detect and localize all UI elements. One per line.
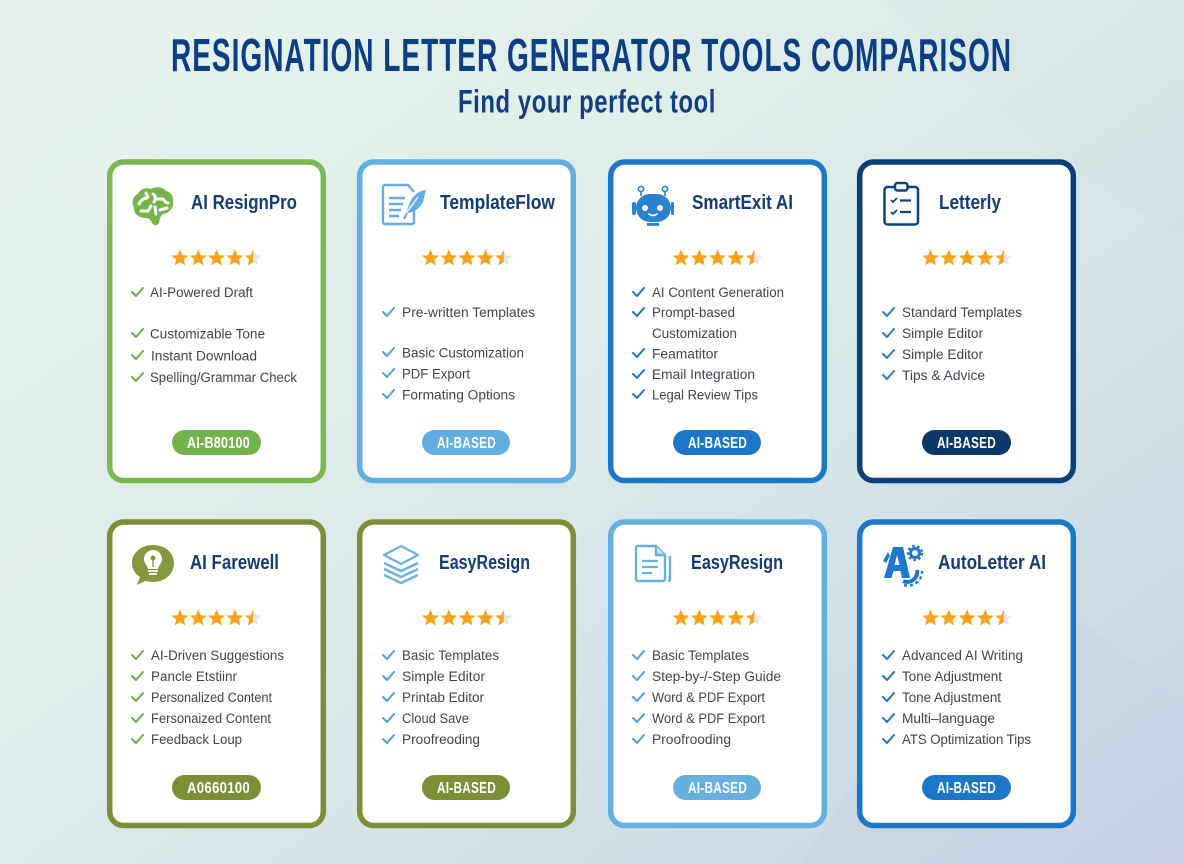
feature list: AI-Powered Draft bbox=[150, 285, 253, 301]
feature list: Cloud Save bbox=[402, 711, 469, 727]
badge bbox=[673, 775, 761, 800]
feature list: Multi–language bbox=[902, 711, 995, 727]
feature list: Tips & Advice bbox=[902, 368, 985, 384]
feature list bbox=[383, 305, 535, 404]
feature list: Spelling/Grammar Check bbox=[150, 370, 298, 386]
feature list: AI Content Generation bbox=[652, 285, 784, 301]
feature list: AI-Driven Suggestions bbox=[151, 648, 284, 664]
star rating bbox=[672, 609, 763, 625]
star rating bbox=[422, 609, 512, 625]
feature list: Basic Templates bbox=[402, 648, 499, 664]
feature list bbox=[132, 648, 284, 748]
feature list bbox=[883, 305, 1022, 384]
badge bbox=[172, 775, 261, 800]
name: AI Farewell bbox=[190, 552, 279, 574]
feature list: Personalized Content bbox=[151, 690, 272, 706]
feature list: Legal Review Tips bbox=[652, 388, 758, 404]
feature list: Pancle Etstiinr bbox=[151, 669, 237, 685]
feature list bbox=[633, 648, 781, 748]
name: Letterly bbox=[939, 192, 1002, 214]
badge: AI-B80100 bbox=[187, 435, 250, 452]
star rating bbox=[922, 249, 1012, 265]
badge: AI-BASED bbox=[937, 780, 996, 797]
panel: SmartExit AI bbox=[611, 162, 824, 480]
feature list: Tone Adjustment bbox=[902, 690, 1001, 706]
icon: brain bbox=[133, 187, 173, 225]
icon: document and quill bbox=[383, 185, 426, 224]
feature list: Feamatitor bbox=[652, 346, 718, 362]
feature list: ATS Optimization Tips bbox=[902, 732, 1031, 748]
feature list: Tone Adjustment bbox=[902, 669, 1002, 685]
badge: AI-BASED bbox=[688, 780, 747, 797]
feature list: Proofrooding bbox=[652, 732, 731, 748]
feature list: Instant Download bbox=[151, 348, 257, 364]
feature list: Prompt-based bbox=[652, 305, 735, 321]
name: EasyResign bbox=[439, 552, 530, 574]
panel: EasyResign (layers) bbox=[360, 522, 573, 826]
feature list: Printab Editor bbox=[402, 690, 484, 706]
feature list: Word & PDF Export bbox=[652, 711, 765, 727]
icon: documents bbox=[636, 546, 670, 582]
badge bbox=[422, 430, 510, 455]
badge: AI-BASED bbox=[437, 435, 496, 452]
icon: stacked layers bbox=[384, 546, 418, 583]
badge bbox=[673, 430, 761, 455]
feature list: Formating Options bbox=[402, 388, 515, 404]
feature list bbox=[132, 285, 298, 386]
feature list: Basic Customization bbox=[402, 346, 524, 362]
feature list bbox=[383, 648, 499, 748]
feature list: Word & PDF Export bbox=[652, 690, 765, 706]
star rating bbox=[922, 609, 1012, 625]
panel: Letterly bbox=[860, 162, 1073, 480]
feature list: Step-by-/-Step Guide bbox=[652, 669, 781, 685]
badge bbox=[922, 430, 1011, 455]
name: EasyResign bbox=[691, 552, 783, 574]
name: SmartExit AI bbox=[692, 192, 793, 214]
badge bbox=[172, 430, 261, 455]
name: AutoLetter AI bbox=[938, 552, 1046, 574]
panel: AI ResignPro bbox=[110, 162, 323, 480]
feature list: Email Integration bbox=[652, 367, 755, 383]
icon: letter A with gears bbox=[883, 546, 922, 586]
star rating bbox=[172, 249, 262, 265]
feature list: Customizable Tone bbox=[150, 326, 265, 342]
badge: A0660100 bbox=[187, 780, 250, 797]
feature list: Standard Templates bbox=[902, 305, 1022, 321]
icon: robot bbox=[632, 186, 674, 226]
feature list: Fersonaized Content bbox=[151, 711, 271, 727]
panel: TemplateFlow bbox=[360, 162, 573, 480]
star rating bbox=[172, 609, 262, 625]
name: TemplateFlow bbox=[440, 192, 555, 214]
badge bbox=[422, 775, 510, 800]
feature list: Simple Editor bbox=[902, 326, 983, 342]
icon: speech bubble with lightbulb bbox=[132, 545, 174, 585]
badge: AI-BASED bbox=[937, 435, 996, 452]
badge: AI-BASED bbox=[437, 780, 496, 797]
feature list: Advanced AI Writing bbox=[902, 648, 1023, 664]
feature list: Proofreoding bbox=[402, 732, 480, 748]
icon: clipboard checklist bbox=[884, 183, 918, 224]
feature list: Basic Templates bbox=[652, 648, 749, 664]
panel: AI Farewell bbox=[110, 522, 323, 826]
panel: AutoLetter AI bbox=[860, 522, 1073, 826]
star rating bbox=[422, 249, 512, 265]
panel: EasyResign (document) bbox=[611, 522, 824, 826]
feature list: Pre-written Templates bbox=[402, 305, 535, 321]
feature list: PDF Export bbox=[402, 366, 470, 382]
star rating bbox=[672, 249, 763, 265]
feature list: Simple Editor bbox=[902, 347, 983, 363]
feature list bbox=[883, 648, 1031, 748]
subtitle: Find your perfect tool bbox=[458, 84, 716, 120]
feature list: Feedback Loup bbox=[151, 732, 242, 748]
badge bbox=[922, 775, 1011, 800]
feature list: Customization bbox=[652, 326, 737, 342]
feature list bbox=[633, 285, 784, 404]
name: AI ResignPro bbox=[191, 192, 297, 214]
badge: AI-BASED bbox=[688, 435, 747, 452]
feature list: Simple Editor bbox=[402, 669, 485, 685]
